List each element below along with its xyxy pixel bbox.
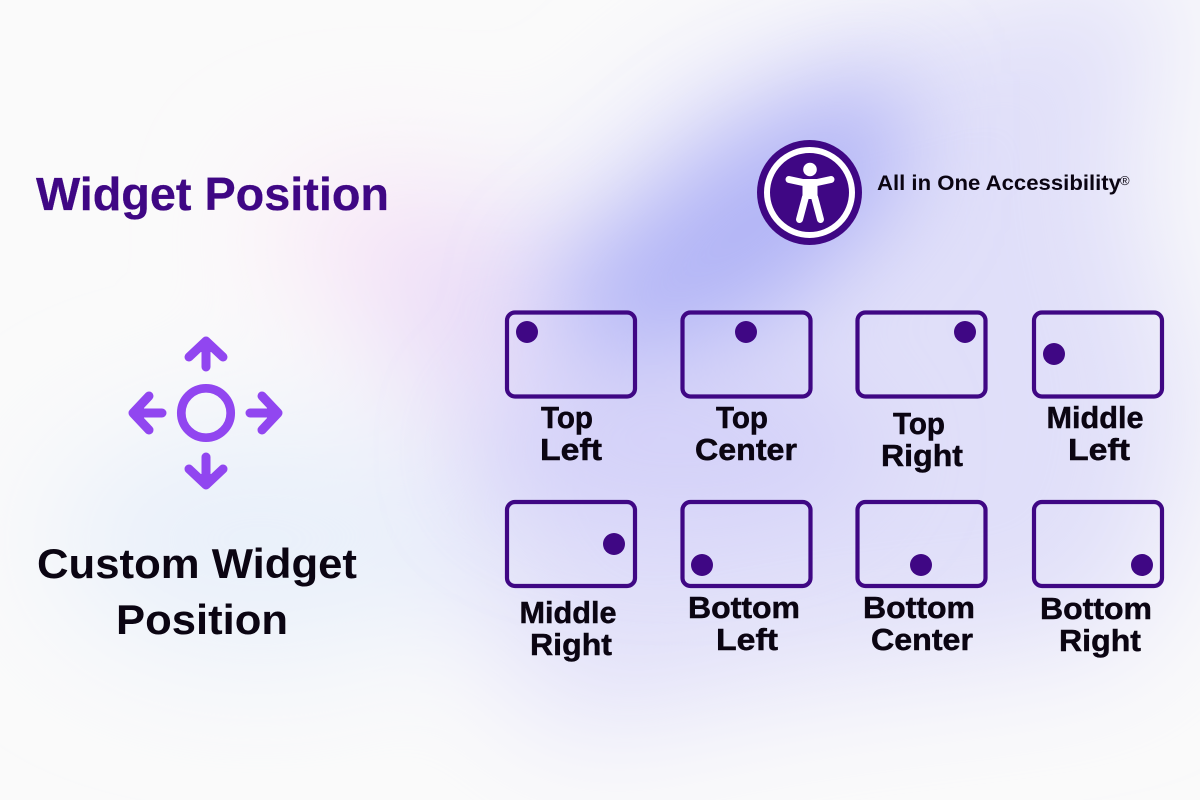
option: Bottom Left: Bottom (688, 590, 800, 625)
option: Top Center: Center (695, 432, 797, 467)
option: Bottom Left (682, 502, 810, 657)
option: Top Left: Left (540, 432, 602, 467)
option: Middle Right: Right (530, 627, 612, 662)
title: Widget Position: Widget Position (36, 168, 389, 220)
heading: Custom Widget Position (37, 540, 357, 643)
option: Bottom Left: Left (716, 622, 778, 657)
option: Bottom Right: Right (1059, 623, 1141, 658)
option: Middle Left (1034, 312, 1162, 467)
option: Bottom Right (1034, 502, 1162, 658)
option: Bottom Right: Bottom (1040, 591, 1152, 626)
option: Middle Right: Middle (520, 595, 616, 630)
logo: All in One Accessibility (757, 140, 1130, 245)
option: Middle Left: Middle (1046, 400, 1144, 435)
option: Top Center: Top (716, 400, 768, 435)
heading: Custom Widget Position: Custom Widget (37, 540, 357, 587)
option: Top Left (507, 312, 635, 467)
option: Middle Left: Left (1068, 432, 1130, 467)
option: Middle Right (507, 502, 635, 662)
option: Top Left: Top (541, 400, 593, 435)
registered mark: ® (1120, 173, 1130, 188)
option: Top Right: Top (893, 406, 945, 441)
icon: move arrows with circle (133, 341, 278, 485)
option: Bottom Center: Center (871, 622, 973, 657)
option: Top Right (858, 312, 986, 473)
option: Top Right: Right (881, 438, 963, 473)
option: Bottom Center (858, 502, 986, 657)
icon: accessibility figure (757, 140, 862, 245)
brand name: All in One Accessibility (877, 171, 1121, 195)
option: Top Center (682, 312, 810, 467)
option: Bottom Center: Bottom (863, 590, 975, 625)
heading: Custom Widget Position: Position (116, 596, 288, 643)
